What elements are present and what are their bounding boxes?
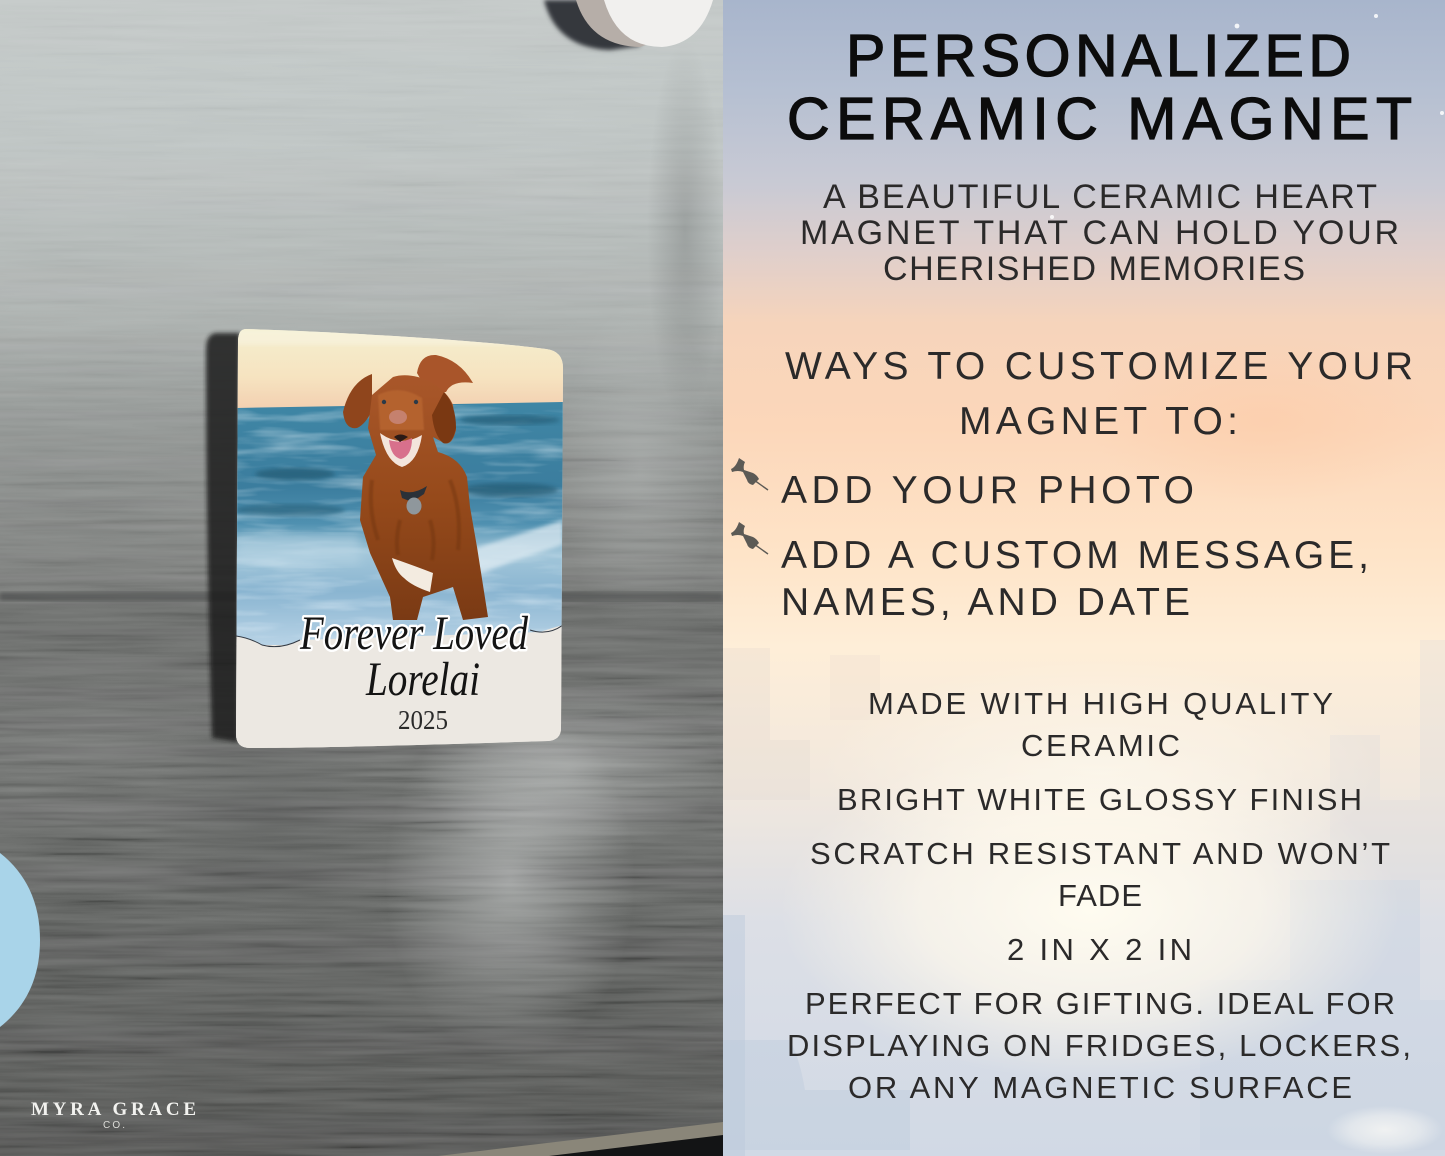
feature: high quality ceramic: CERAMIC [1021,728,1180,763]
list item: custom message: NAMES, AND DATE [781,581,1190,624]
intro text: A BEAUTIFUL CERAMIC HEART [823,178,1377,216]
feature: scratch resistant: FADE [1058,878,1142,913]
logo: Myra Grace Co.: CO. [103,1120,125,1131]
heading: CERAMIC MAGNET [787,86,1412,152]
feature: gifting: DISPLAYING ON FRIDGES, LOCKERS, [787,1028,1411,1063]
customize heading: MAGNET TO: [959,400,1238,443]
magnet caption: Forever Loved [298,613,530,652]
feature: high quality ceramic [870,692,1332,756]
list item: photo: ADD YOUR PHOTO [781,469,1194,512]
magnet shadow [206,333,240,742]
magnet caption: Lorelai: Lorelai [365,653,480,706]
panel: watercolor product details [723,0,1445,1156]
magnet sky [236,329,563,410]
magnet caption: Forever Loved: Forever Loved [299,607,529,660]
watercolor city skyline [723,640,1445,1156]
feature: scratch resistant: SCRATCH RESISTANT AND WON’T [810,836,1390,871]
intro text: MAGNET THAT CAN HOLD YOUR [800,214,1399,252]
heading [789,34,1412,140]
icon: push pin 1 [731,458,768,490]
customize heading [785,352,1412,434]
stars [1016,14,1444,219]
feature: glossy finish: BRIGHT WHITE GLOSSY FINISH [837,782,1362,817]
magnet sea [235,402,563,645]
feature: high quality ceramic: MADE WITH HIGH QUALITY [868,686,1333,721]
feature: gifting [790,992,1408,1098]
magnet caption: Forever Loved: Forever Loved [299,607,529,660]
icon: white round magnet at top [544,0,713,50]
list item: custom message: ADD A CUSTOM MESSAGE, [781,534,1369,577]
magnet white caption band [236,625,563,748]
feature: size: 2 IN X 2 IN [1007,932,1192,967]
magnet caption: year: 2025 [398,705,448,735]
feature: scratch resistant [812,842,1390,906]
logo: Myra Grace Co. [31,1102,196,1128]
ceramic photo magnet [235,329,563,748]
customize heading: WAYS TO CUSTOMIZE YOUR [785,345,1413,388]
icon: push pin 2 [731,522,768,554]
feature: gifting: OR ANY MAGNETIC SURFACE [848,1070,1352,1105]
intro text [802,184,1398,280]
heading: PERSONALIZED [846,23,1351,89]
dog [343,355,488,620]
panel: stainless steel fridge photo [0,0,723,1156]
floor strip [438,1122,723,1156]
logo: Myra Grace Co.: MYRA GRACE [31,1099,196,1120]
icon: light blue round magnet [0,853,40,1027]
intro text: CHERISHED MEMORIES [883,250,1305,288]
feature: gifting: PERFECT FOR GIFTING. IDEAL FOR [805,986,1395,1021]
list item: custom message [781,540,1366,620]
